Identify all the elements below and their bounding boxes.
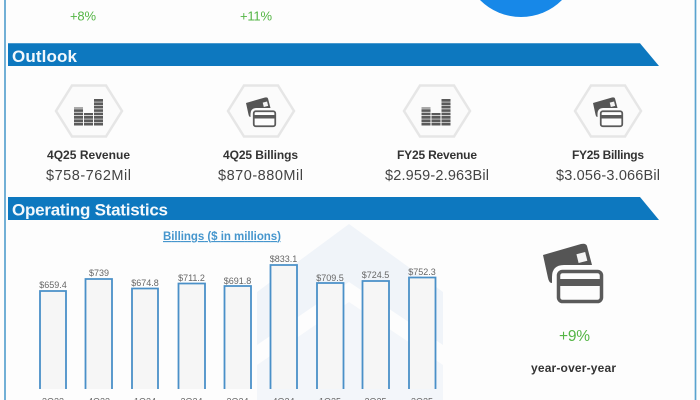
growth figure: +11%: +11% bbox=[240, 8, 272, 24]
outlook item: 4Q25 Billings: 4Q25 Billings bbox=[223, 148, 298, 162]
heading banner: Operating Statistics bbox=[8, 197, 659, 220]
chart title: Billings ($ in millions) bbox=[163, 231, 281, 243]
growth figure: +8%: +8% bbox=[70, 8, 96, 24]
heading banner: Outlook: Outlook bbox=[12, 47, 78, 66]
outlook item: 4Q25 Revenue bbox=[46, 86, 131, 184]
bar chart: billings: $752.3 bbox=[408, 267, 436, 277]
bar chart: billings: $739 bbox=[89, 268, 109, 278]
heading banner: Operating Statistics: Operating Statistics bbox=[12, 200, 168, 220]
outlook item: FY25 Revenue: FY25 Revenue bbox=[397, 148, 477, 162]
bar chart: billings: $724.5 bbox=[362, 270, 389, 280]
bar chart: billings: $833.1 bbox=[270, 254, 297, 264]
watermark chevrons bbox=[257, 224, 443, 400]
outlook item: FY25 Billings: FY25 Billings bbox=[572, 148, 644, 162]
outlook item: FY25 Revenue bbox=[385, 86, 489, 184]
heading banner: Outlook bbox=[8, 43, 659, 66]
circle emblem bbox=[463, 0, 579, 17]
year-over-year growth: +9%: +9% bbox=[559, 328, 590, 345]
outlook item: 4Q25 Billings bbox=[218, 86, 303, 184]
outlook item: 4Q25 Revenue: 4Q25 Revenue bbox=[47, 148, 130, 162]
bar chart: billings: $659.4 bbox=[39, 280, 67, 290]
bar chart: billings bbox=[39, 254, 436, 400]
outlook item: FY25 Revenue: $2.959-2.963Bil bbox=[385, 168, 489, 184]
outlook item: FY25 Billings: $3.056-3.066Bil bbox=[556, 168, 660, 184]
bar chart: billings: $691.8 bbox=[224, 276, 251, 286]
outlook item: 4Q25 Billings: $870-880Mil bbox=[218, 168, 303, 184]
outlook item: 4Q25 Revenue: $758-762Mil bbox=[46, 168, 131, 184]
bar chart: billings: $674.8 bbox=[131, 278, 159, 288]
outlook item: FY25 Billings bbox=[556, 86, 660, 184]
bar chart: billings: $709.5 bbox=[316, 273, 344, 283]
year-over-year label: year-over-year bbox=[531, 361, 616, 375]
icon: credit cards large bbox=[543, 244, 602, 302]
bar chart: billings: $711.2 bbox=[178, 273, 205, 283]
